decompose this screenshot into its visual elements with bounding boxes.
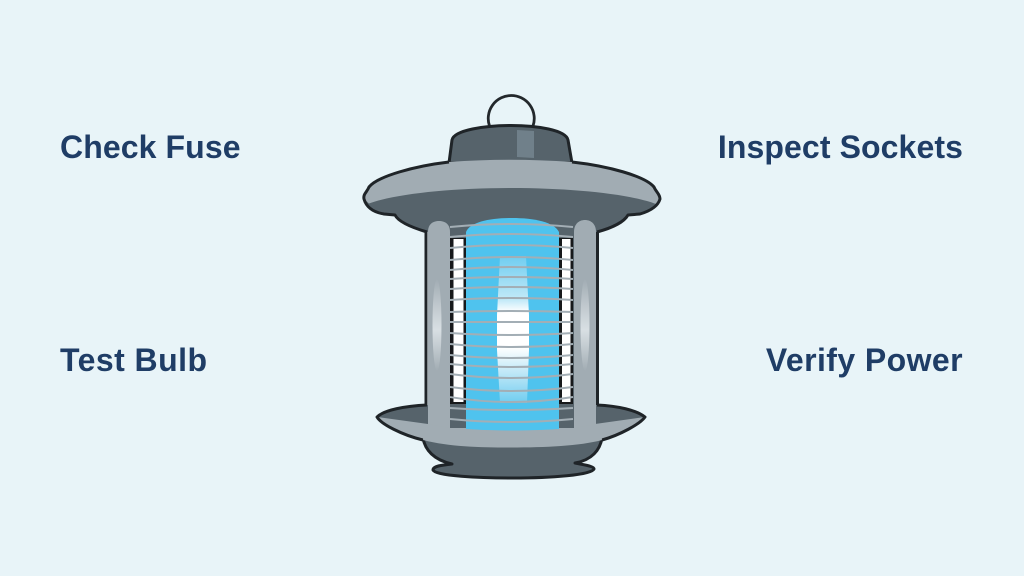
label: inspect sockets: Inspect Sockets <box>718 129 963 165</box>
right electrified grid <box>558 224 574 428</box>
glowing bulb <box>497 256 529 403</box>
body outline <box>426 225 598 410</box>
left post <box>428 221 450 429</box>
label: test bulb: Test Bulb <box>60 342 207 378</box>
grid wires <box>450 224 573 422</box>
label: check fuse: Check Fuse <box>60 129 241 165</box>
left electrified grid <box>449 224 467 428</box>
blue glass tube <box>466 218 559 430</box>
lower plate <box>377 405 645 448</box>
top cap <box>449 126 572 163</box>
handle ring <box>488 96 534 126</box>
bowl and foot <box>423 438 602 478</box>
lower collar <box>423 424 602 445</box>
right post <box>574 220 596 429</box>
label: verify power: Verify Power <box>766 342 963 378</box>
top brim <box>364 160 660 232</box>
